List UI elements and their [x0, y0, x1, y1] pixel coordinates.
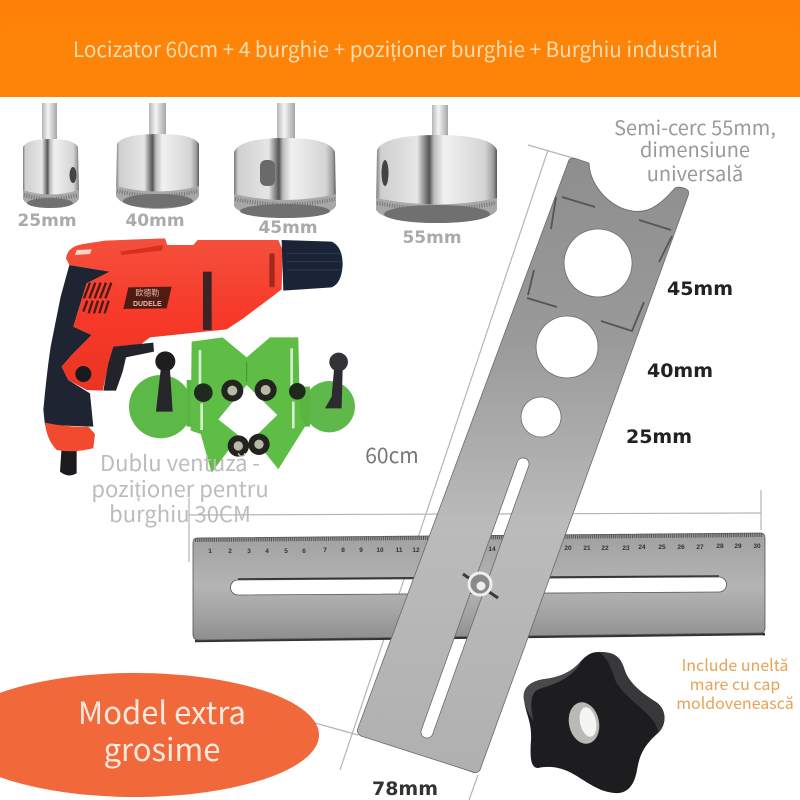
callout: semi-circle note: dimensiune	[640, 134, 750, 163]
ruler numbers: 12	[412, 547, 420, 554]
label: 60cm length: 60cm	[365, 440, 419, 470]
icon: red power drill	[43, 238, 343, 475]
ruler numbers: 7	[323, 547, 327, 554]
label: 25mm hole: 25mm	[626, 426, 692, 448]
ruler slot shading	[238, 576, 719, 579]
callout: semi-circle note: Semi-cerc 55mm,	[614, 112, 776, 141]
ruler numbers: 6	[302, 548, 306, 555]
icon: 40mm hole saw bit	[116, 103, 199, 209]
caption: double suction positioner: poziționer pentru	[91, 472, 269, 504]
icon: 55mm hole saw bit	[376, 105, 497, 223]
ruler numbers: 29	[734, 543, 742, 550]
drill nameplate: 欧德勒	[135, 287, 159, 298]
metal locator strip	[357, 158, 689, 773]
callout: included tool note	[676, 652, 794, 714]
callout: semi-circle note	[614, 112, 776, 187]
label: 45mm hole: 45mm	[667, 278, 733, 300]
ruler numbers: 28	[716, 543, 724, 550]
ruler numbers: 26	[677, 544, 685, 551]
label: 78mm width: 78mm	[372, 778, 438, 800]
ruler numbers: 9	[359, 547, 363, 554]
ruler plate with scale	[193, 533, 765, 641]
badge: extra thickness model: Model extra	[78, 688, 246, 733]
ruler numbers: 21	[583, 545, 591, 552]
caption: double suction positioner	[91, 446, 269, 529]
ruler tick marks	[195, 535, 763, 540]
ruler numbers: 11	[396, 547, 403, 554]
ruler numbers: 3	[247, 548, 251, 555]
ruler numbers: 30	[753, 543, 761, 550]
engraved square guide marks	[527, 197, 672, 331]
label: 45mm: 45mm	[258, 218, 318, 238]
caption: double suction positioner: Dublu ventuză -	[100, 446, 260, 478]
badge: extra thickness model: grosime	[104, 725, 220, 770]
ruler numbers: 4	[265, 548, 269, 555]
icon: black star knob	[524, 652, 664, 793]
label: 40mm hole: 40mm	[647, 360, 713, 382]
callout: included tool note: mare cu cap	[690, 671, 780, 695]
ruler numbers: 24	[638, 544, 646, 551]
drill nameplate	[123, 287, 172, 309]
ruler numbers: 23	[622, 545, 630, 552]
ruler numbers: 5	[284, 548, 288, 555]
wing nut	[463, 573, 498, 598]
drill nameplate: DUDELE	[133, 301, 162, 308]
header inner strip	[0, 27, 800, 97]
callout: included tool note: Include uneltă	[682, 652, 788, 676]
badge: extra thickness model	[0, 673, 319, 797]
icon: green double suction cup positioner	[129, 337, 355, 473]
ruler numbers	[208, 543, 761, 555]
label: 55mm: 55mm	[402, 228, 462, 248]
label: 25mm: 25mm	[17, 211, 77, 231]
header title: Locizator 60cm + 4 burghie + poziționer burghie + Burghiu industrial	[73, 34, 718, 64]
ruler numbers: 20	[564, 545, 572, 552]
ruler numbers: 25	[658, 544, 666, 551]
ruler numbers: 22	[601, 545, 609, 552]
ruler numbers: 10	[376, 547, 384, 554]
caption: double suction positioner: burghiu 30CM	[109, 497, 251, 529]
dimension lines	[189, 145, 761, 800]
icon: 25mm hole saw bit	[23, 103, 79, 208]
ruler numbers: 14	[488, 546, 496, 553]
callout: semi-circle note: universală	[647, 158, 743, 187]
ruler numbers: 1	[208, 548, 212, 555]
callout: included tool note: moldovenească	[676, 690, 794, 714]
ruler numbers: 27	[696, 544, 704, 551]
header banner	[0, 0, 800, 97]
ruler numbers: 8	[341, 547, 345, 554]
icon: 45mm hole saw bit	[234, 103, 336, 218]
ruler numbers: 2	[228, 548, 232, 555]
label: 40mm: 40mm	[125, 211, 185, 231]
